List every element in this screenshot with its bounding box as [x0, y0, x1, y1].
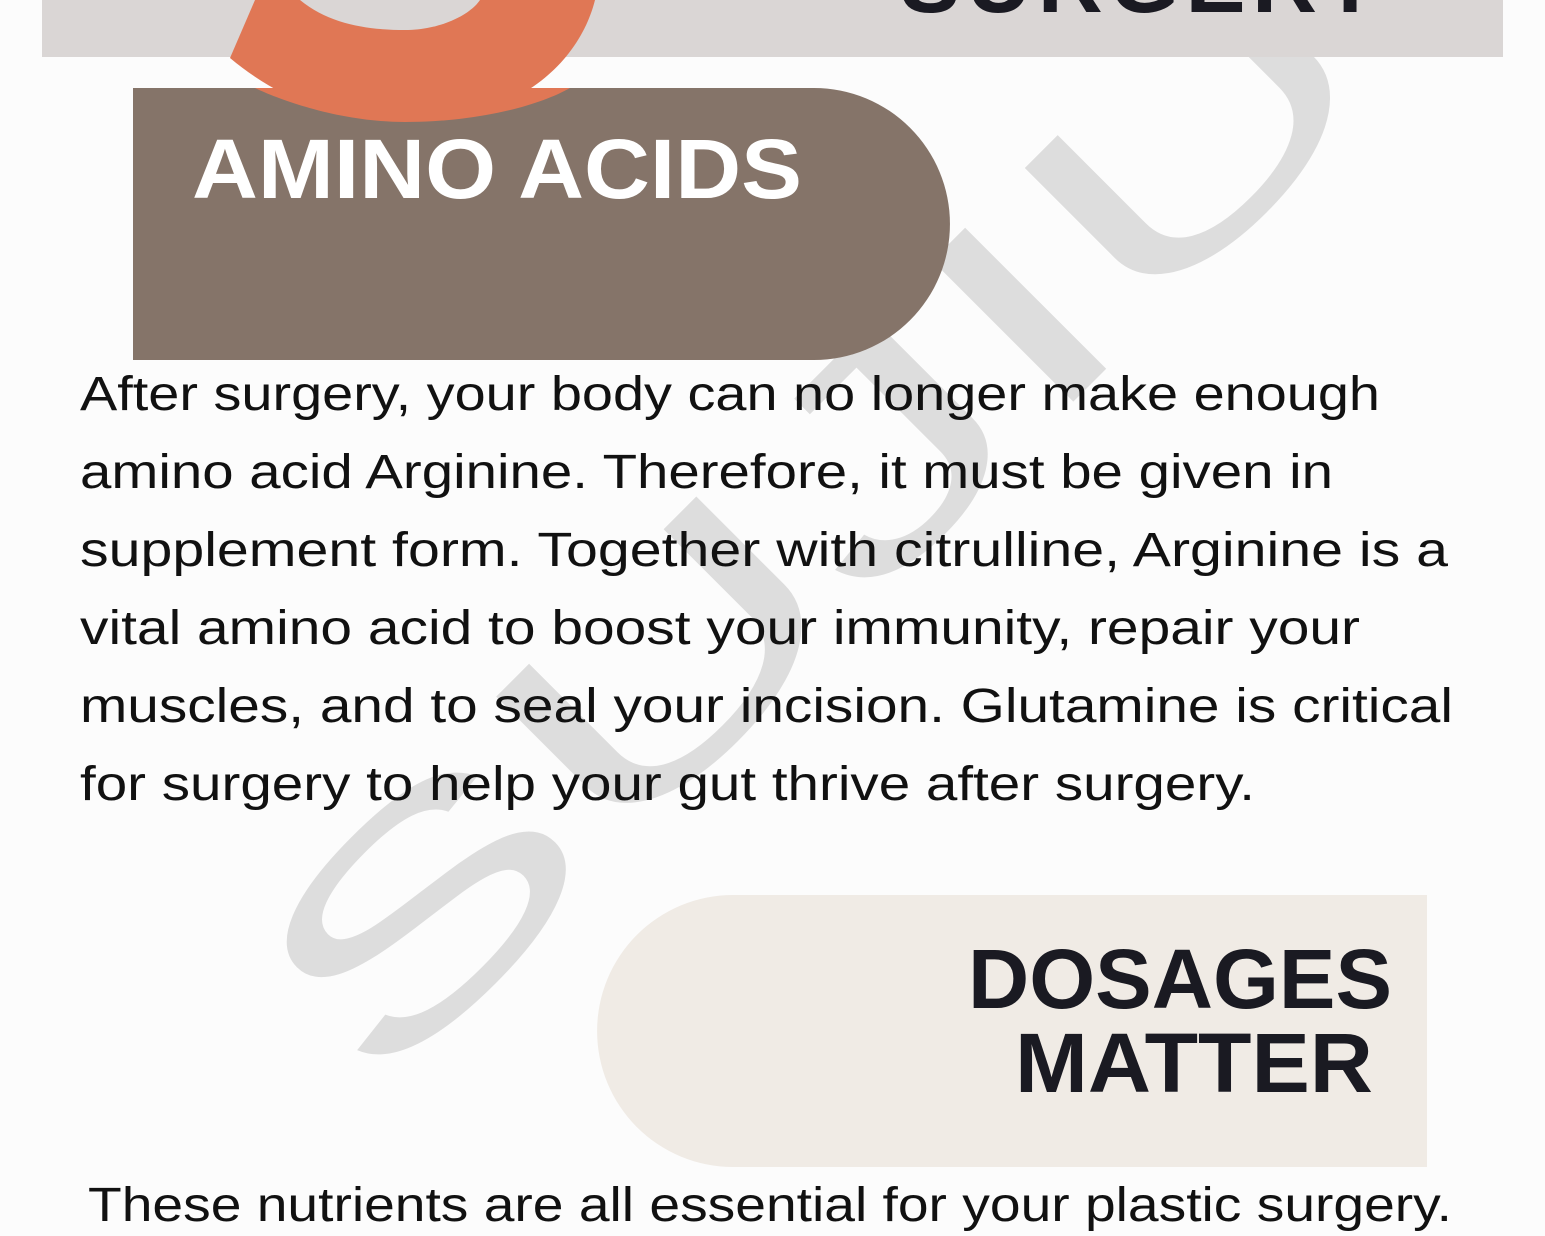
text block: closing line: These nutrients are all essential for your plastic surgery. — [88, 1179, 1452, 1232]
heading: DOSAGES MATTER: MATTER — [1015, 1016, 1373, 1110]
watermark: SUJIU — [190, 0, 1437, 1144]
text block: amino acids body: supplement form. Together with citrulline, Arginine is a — [80, 524, 1448, 577]
text block: amino acids body — [80, 368, 1453, 811]
text block: amino acids body: for surgery to help your gut thrive after surgery. — [80, 758, 1255, 811]
panel: amino acids heading — [133, 88, 950, 360]
text block: amino acids body: muscles, and to seal your incision. Glutamine is critical — [80, 680, 1453, 733]
heading: DOSAGES MATTER — [968, 932, 1392, 1110]
text block: amino acids body: vital amino acid to boost your immunity, repair your — [80, 602, 1360, 655]
orange numeral — [230, 0, 595, 122]
heading: AMINO ACIDS: AMINO ACIDS — [192, 122, 802, 216]
text block: amino acids body: After surgery, your body can no longer make enough — [80, 368, 1380, 421]
heading: DOSAGES MATTER: DOSAGES — [968, 932, 1392, 1026]
header band — [42, 0, 1503, 57]
text block: amino acids body: amino acid Arginine. Therefore, it must be given in — [80, 446, 1333, 499]
panel: dosages matter heading — [597, 895, 1427, 1167]
